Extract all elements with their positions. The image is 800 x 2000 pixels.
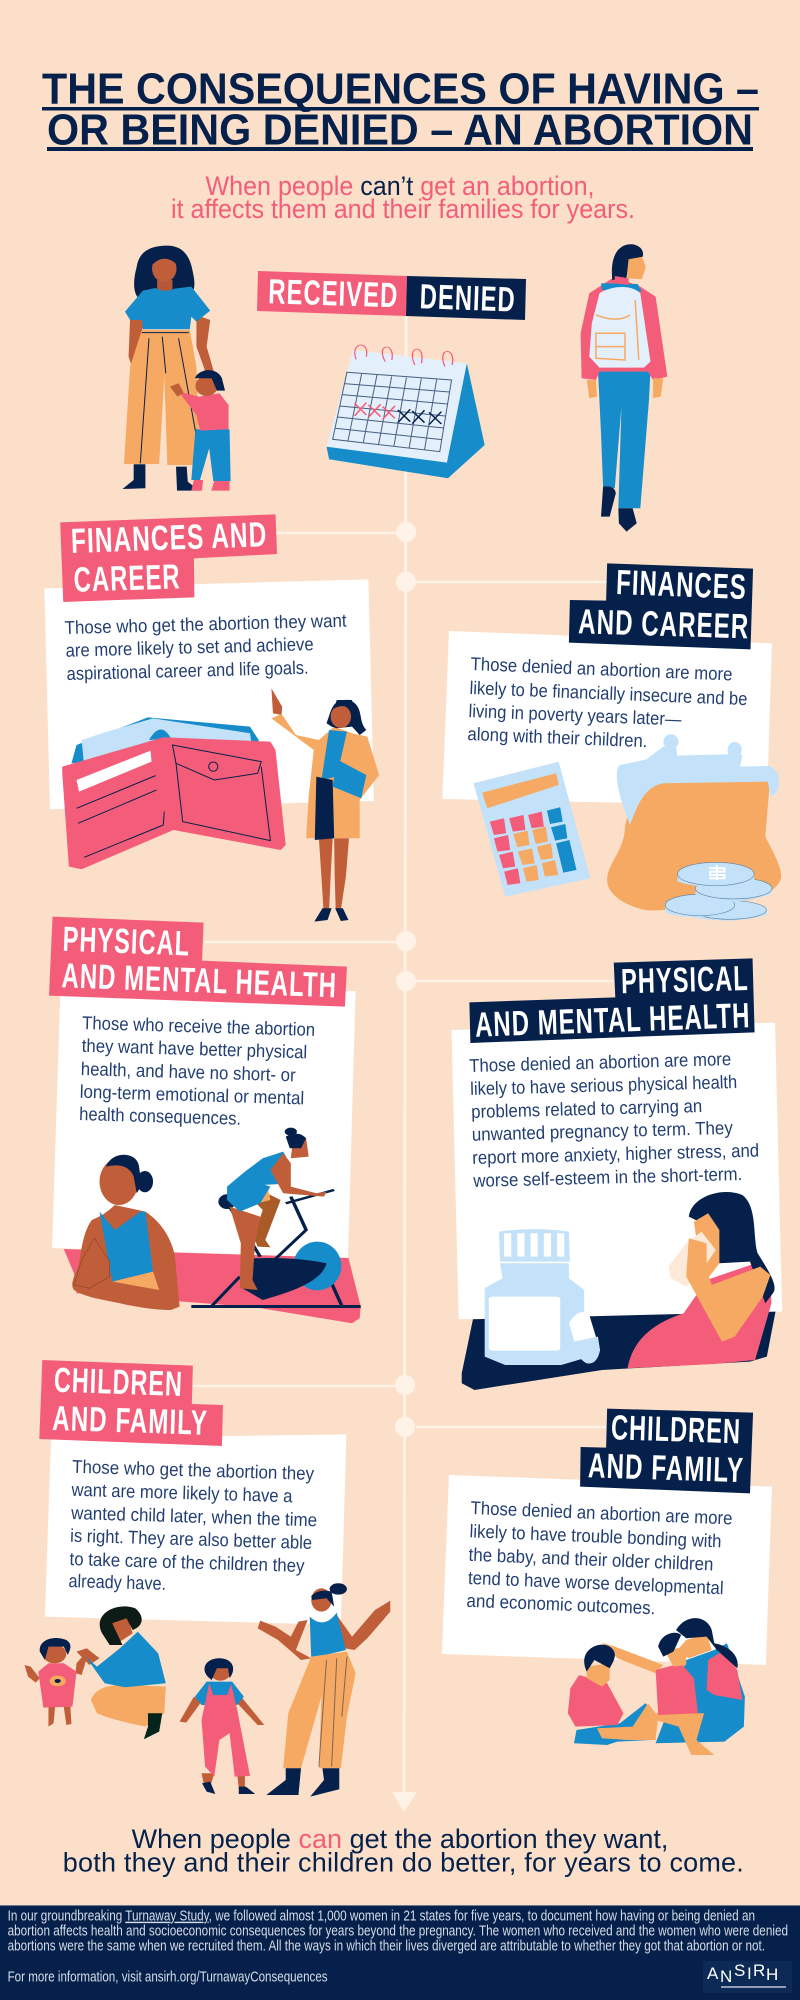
body text [79, 1012, 315, 1129]
heading [60, 514, 277, 602]
heading: AND FAMILY [52, 1399, 208, 1443]
body text: already have. [68, 1570, 166, 1594]
title: THE CONSEQUENCES OF HAVING – [42, 64, 759, 114]
body text: Those who get the abortion they [72, 1456, 315, 1484]
heading [39, 1360, 223, 1446]
body text: wanted child later, when the time [70, 1502, 317, 1530]
heading [469, 958, 755, 1045]
ANSIRH logo: N [720, 1967, 732, 1986]
panel: denied, physical and mental health [452, 958, 782, 1390]
body text: Those who receive the abortion [82, 1012, 315, 1040]
title: OR BEING DENIED – AN ABORTION [47, 106, 753, 154]
ANSIRH logo: I [747, 1964, 752, 1983]
legend: received and denied: DENIED [419, 277, 516, 320]
illustration: medicine bottle and pregnant woman with tissue [462, 1192, 776, 1390]
body text: Those denied an abortion are more [470, 653, 733, 685]
white card [452, 1023, 782, 1319]
heading: CHILDREN [610, 1408, 742, 1451]
body text: tend to have worse developmental [468, 1567, 724, 1598]
illustration: calendar [327, 345, 485, 478]
central timeline with arrow [193, 316, 614, 1812]
illustration: calculator [473, 762, 590, 897]
body text: Those denied an abortion are more [469, 1048, 731, 1076]
panel: received, children and family [24, 1360, 390, 1797]
illustration: wallet [62, 717, 286, 869]
closing statement: both they and their children do better, for years to come. [63, 1848, 744, 1878]
white card [442, 1475, 772, 1665]
legend: received and denied [257, 271, 526, 320]
body text [64, 610, 347, 684]
title [42, 64, 759, 154]
body text: want are more likely to have a [70, 1479, 293, 1506]
ANSIRH logo: H [766, 1965, 778, 1984]
body text: report more anxiety, higher stress, and [472, 1139, 759, 1168]
ANSIRH logo: S [734, 1961, 745, 1980]
subtitle: When people can’t get an abortion, [206, 171, 594, 201]
ANSIRH logo: R [753, 1961, 765, 1980]
heading: CAREER [73, 557, 181, 600]
heading: PHYSICAL [62, 920, 191, 964]
body text: worse self-esteem in the short-term. [472, 1163, 743, 1191]
body text: long-term emotional or mental [79, 1081, 305, 1108]
white card [44, 579, 374, 809]
body text: to take care of the children they [69, 1548, 305, 1576]
body text: aspirational career and life goals. [66, 657, 309, 684]
ANSIRH logo [703, 1961, 792, 1993]
subtitle: it affects them and their families for years. [171, 194, 635, 224]
body text: health, and have no short- or [80, 1058, 296, 1085]
body text: Those denied an abortion are more [470, 1497, 733, 1529]
legend: received and denied: RECEIVED [268, 272, 399, 315]
heading: FINANCES AND [70, 515, 268, 561]
body text [466, 1497, 733, 1618]
body text: problems related to carrying an [471, 1095, 702, 1122]
body text [467, 653, 748, 751]
white card [52, 991, 356, 1258]
body text: health consequences. [79, 1103, 241, 1129]
heading: CHILDREN [53, 1361, 184, 1404]
white card [442, 631, 772, 806]
body text: likely to have trouble bonding with [469, 1520, 722, 1551]
ANSIRH logo: A [707, 1964, 719, 1983]
body text: unwanted pregnancy to term. They [472, 1117, 734, 1145]
body text: likely to have serious physical health [470, 1071, 737, 1099]
panel: denied, finances and career [442, 563, 781, 921]
study note [8, 1909, 788, 1986]
panel: received, physical and mental health [49, 917, 361, 1323]
illustration: meditating woman and cyclist on a pink mat [64, 1128, 361, 1323]
body text: Those who get the abortion they want [64, 610, 347, 638]
heading [49, 917, 347, 1007]
body text: is right. They are also better able [70, 1525, 312, 1553]
body text [469, 1048, 759, 1191]
body text [68, 1456, 317, 1594]
illustration: child in overalls [180, 1658, 264, 1794]
heading: AND MENTAL HEALTH [61, 956, 338, 1005]
illustration: person with backpack [581, 244, 667, 532]
body text: are more likely to set and achieve [65, 633, 314, 661]
body text: along with their children. [467, 723, 648, 751]
closing statement: When people can get the abortion they want, [132, 1824, 668, 1854]
illustration: coin purse [607, 734, 781, 921]
body text: living in poverty years later— [468, 700, 682, 730]
heading [569, 563, 753, 649]
body text: they want have better physical [81, 1035, 308, 1062]
study note: For more information, visit ansirh.org/TurnawayConsequences [8, 1970, 328, 1986]
illustration: woman in coat [271, 688, 379, 922]
heading [580, 1408, 753, 1493]
footer band [0, 1905, 800, 2000]
illustration: mother comforting two children [568, 1618, 745, 1755]
white card [45, 1434, 346, 1625]
illustration: woman with arms out [258, 1583, 390, 1797]
panel: denied, children and family [442, 1408, 772, 1755]
illustration: toddler and kneeling adult [24, 1606, 166, 1739]
closing statement [63, 1824, 744, 1878]
body text: and economic outcomes. [466, 1590, 656, 1618]
subtitle [171, 171, 635, 224]
panel: received, finances and career [44, 514, 379, 922]
illustration: mother and child [122, 246, 231, 491]
body text: the baby, and their older children [468, 1544, 714, 1575]
body text: likely to be financially insecure and be [469, 677, 748, 709]
